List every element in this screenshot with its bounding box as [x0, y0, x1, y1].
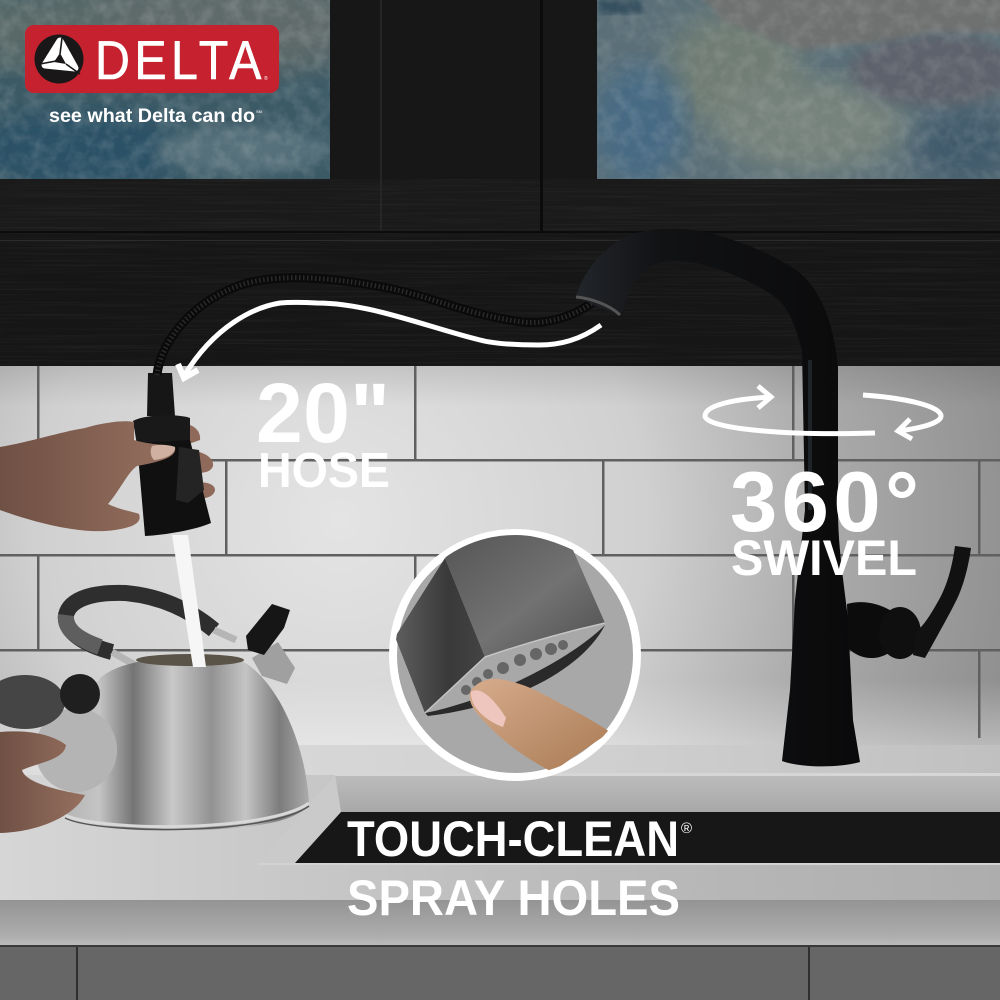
- finger: [469, 679, 610, 772]
- logo wordmark: DELTA: [95, 29, 266, 91]
- button: [176, 447, 204, 503]
- kettle: [65, 593, 309, 830]
- kettle handle: [66, 593, 214, 652]
- 20 inch hose label: HOSE: [258, 444, 390, 498]
- hose: [157, 278, 592, 375]
- left window with trees: [0, 0, 330, 179]
- registered mark: ®: [264, 75, 268, 82]
- 360 degree swivel label: 360°: [730, 455, 919, 550]
- handle hub: [847, 602, 893, 658]
- bottom cabinet: [0, 945, 1000, 1000]
- kettle body: [65, 660, 309, 830]
- inset: finger on spray holes: [393, 533, 637, 777]
- arrow: 20 inch hose pull-out: [178, 302, 601, 378]
- kettle opening: [136, 654, 244, 666]
- hose connector: [147, 373, 175, 416]
- tagline: see what Delta can do: [49, 106, 255, 127]
- background: dark wood window frame: [0, 0, 1000, 366]
- head face rim: [425, 625, 605, 716]
- 20 inch hose label: 20": [256, 366, 390, 460]
- kettle base ring: [65, 803, 309, 830]
- faucet: [576, 229, 971, 766]
- faucet neck and spout: [576, 229, 860, 766]
- touch-clean spray holes label: [347, 811, 692, 926]
- lid knob: [60, 674, 100, 714]
- collar: [133, 415, 190, 445]
- lower hand holding kettle lid: [0, 674, 117, 833]
- spout outlet: [576, 297, 620, 315]
- upper hand fingers behind spray head: [185, 424, 215, 499]
- arrow: swivel rotation: [705, 386, 941, 439]
- lid grey cap: [0, 675, 65, 729]
- service mark: SM: [256, 109, 262, 114]
- lid dome: [35, 708, 117, 792]
- right window with trees and sky: [595, 0, 1000, 185]
- body: [137, 440, 211, 536]
- spray head: [133, 373, 211, 536]
- kettle handle brackets: [112, 630, 236, 665]
- neck highlight: [808, 360, 812, 510]
- inset background: [393, 533, 637, 777]
- fingernail: [471, 690, 506, 727]
- thumb nail: [151, 445, 175, 460]
- handle ball: [879, 607, 921, 659]
- subway tile backsplash: [0, 366, 1000, 756]
- spray nozzles: [461, 640, 568, 695]
- countertop and undermount sink: [0, 745, 1000, 945]
- handle lever: [913, 546, 971, 658]
- water stream: [172, 535, 206, 667]
- logo badge: [25, 25, 279, 127]
- touch-clean spray holes label: ®: [681, 820, 692, 837]
- upper hand: [0, 421, 175, 531]
- 360 degree swivel label: SWIVEL: [731, 530, 917, 586]
- touch-clean spray holes label: SPRAY HOLES: [347, 870, 680, 926]
- kettle spout and whistle: [246, 604, 295, 684]
- touch-clean spray holes label: TOUCH-CLEAN: [347, 811, 679, 867]
- head right facet: [445, 534, 605, 657]
- head edge highlight: [425, 623, 605, 713]
- logo mark: [34, 34, 84, 84]
- head left facet: [395, 558, 485, 713]
- lower hand: [0, 731, 85, 833]
